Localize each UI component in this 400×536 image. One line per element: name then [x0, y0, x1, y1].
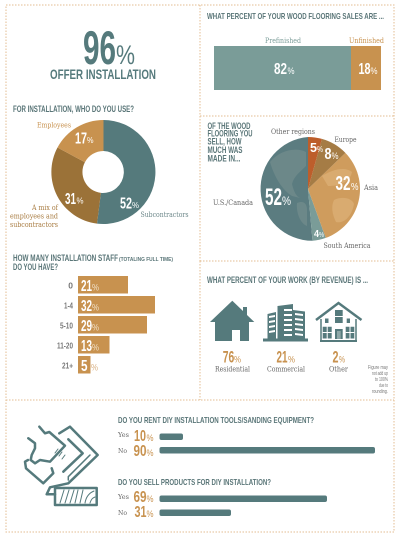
donut chart: installers	[10, 120, 189, 229]
pie chart: origin globe: Other regions	[271, 128, 315, 136]
stats: work by revenue: Commercial	[267, 366, 306, 374]
stats: work by revenue	[215, 348, 349, 374]
pie chart: origin globe: 5	[310, 140, 317, 155]
pie chart: origin globe: South America	[324, 242, 370, 250]
stats: work by revenue: Other	[329, 366, 349, 374]
stats: work by revenue: %	[339, 354, 345, 364]
bars: rent DIY tools: 10	[134, 428, 146, 445]
bar chart: installation staff: 29	[81, 318, 92, 335]
bars: rent DIY tools: %	[146, 448, 154, 458]
heading: sell DIY products: DO YOU SELL PRODUCTS FOR DIY INSTALLATION?	[118, 477, 271, 487]
pie chart: origin globe	[213, 128, 378, 250]
bars: rent DIY tools: %	[146, 433, 154, 443]
pie chart: origin globe: 52	[265, 184, 282, 211]
bar chart: installation staff: 21	[81, 278, 92, 295]
stacked bar: prefinished vs unfinished: Prefinished	[265, 37, 301, 45]
heading: who do you use: FOR INSTALLATION, WHO DO YOU USE?	[13, 104, 134, 114]
bars: sell DIY products: 31	[134, 504, 147, 521]
bar chart: installation staff: %	[91, 362, 98, 372]
bar chart: installation staff: 0	[68, 280, 73, 290]
bars: rent DIY tools: 90	[134, 443, 147, 460]
donut chart: installers: subcontractors	[10, 221, 58, 229]
heading: installation staff: (TOTALING FULL TIME)	[119, 257, 173, 263]
icon: office buildings	[263, 304, 308, 342]
bar chart: installation staff: 5	[81, 358, 88, 375]
heading: origin of wood flooring: MUCH WAS	[208, 145, 242, 155]
headline stat: 96% offer installation: 96	[83, 21, 116, 74]
footnote	[368, 365, 388, 395]
icon: house	[210, 301, 254, 341]
donut chart: installers: 17	[75, 130, 87, 148]
pie chart: origin globe: %	[319, 232, 324, 239]
bar chart: installation staff: %	[92, 282, 99, 292]
bars: sell DIY products: Yes	[117, 493, 129, 501]
bar chart: installation staff: %	[92, 322, 99, 332]
bar chart: installation staff: %	[92, 342, 99, 352]
pie chart: origin globe: %	[351, 182, 359, 193]
heading: origin of wood flooring	[208, 121, 252, 164]
bars: sell DIY products: %	[146, 509, 154, 519]
stats: work by revenue: %	[288, 354, 295, 364]
bar chart: installation staff: 1-4	[64, 300, 73, 310]
footnote: due to	[379, 383, 388, 389]
stacked bar: prefinished vs unfinished: 82	[274, 61, 287, 78]
donut chart: installers: A mix of	[31, 204, 59, 212]
stacked bar: prefinished vs unfinished: 18	[358, 61, 371, 78]
pie chart: origin globe: 4	[314, 229, 319, 240]
footnote: not add up	[372, 371, 388, 377]
bars: sell DIY products: No	[118, 509, 127, 517]
bars: sell DIY products: %	[146, 494, 154, 504]
heading: origin of wood flooring: MADE IN...	[208, 154, 240, 164]
icon: barn-style building	[316, 303, 362, 342]
bars: rent DIY tools: No	[118, 447, 127, 455]
donut chart: installers: %	[132, 200, 139, 210]
stacked bar: prefinished vs unfinished	[214, 37, 384, 90]
stats: work by revenue: 76	[223, 348, 234, 366]
stats: work by revenue: 2	[332, 348, 338, 366]
icon: floor sanding tool and wood plank	[25, 427, 98, 505]
footnote: Figure may	[368, 365, 388, 371]
donut chart: installers: %	[87, 135, 94, 145]
donut chart: installers: 31	[65, 191, 76, 208]
donut chart: installers: 52	[120, 196, 132, 212]
footnote: rounding.	[372, 389, 388, 395]
bar chart: installation staff: 13	[81, 338, 92, 355]
heading: origin of wood flooring: OF THE WOOD	[208, 121, 251, 131]
pie chart: origin globe: %	[282, 194, 291, 208]
heading: installation staff	[13, 253, 173, 272]
pie chart: origin globe: %	[332, 151, 338, 161]
stacked bar: prefinished vs unfinished: %	[370, 66, 378, 76]
stats: work by revenue: %	[234, 354, 241, 364]
heading: rent DIY tools: DO YOU RENT DIY INSTALLATION TOOLS/SANDING EQUIPMENT?	[118, 415, 314, 425]
pie chart: origin globe: Europe	[334, 136, 356, 144]
donut chart: installers: Employees	[37, 122, 71, 130]
bar chart: installation staff: 5-10	[60, 320, 73, 330]
pie chart: origin globe: U.S./Canada	[213, 199, 253, 207]
headline stat: 96% offer installation: %	[116, 40, 135, 70]
footnote: to 100%	[375, 377, 388, 383]
pie chart: origin globe: Asia	[363, 184, 378, 192]
bar chart: installation staff: 32	[81, 298, 92, 315]
bars: sell DIY products: 69	[134, 489, 147, 506]
stacked bar: prefinished vs unfinished: %	[288, 66, 294, 76]
bar chart: installation staff: 11-20	[57, 340, 73, 350]
heading: installation staff: DO YOU HAVE?	[13, 262, 58, 272]
stats: work by revenue: Residential	[215, 366, 251, 374]
pie chart: origin globe: 8	[324, 146, 332, 163]
headline stat: 96% offer installation: OFFER INSTALLATION	[50, 66, 156, 82]
donut chart: installers: employees and	[10, 212, 58, 220]
heading: origin of wood flooring: FLOORING YOU	[208, 129, 252, 139]
donut chart: installers: Subcontractors	[140, 211, 189, 219]
heading: origin of wood flooring: SELL, HOW	[208, 136, 242, 146]
bar chart: installation staff	[57, 276, 155, 375]
pie chart: origin globe: 32	[336, 173, 350, 195]
stats: work by revenue: 21	[276, 348, 288, 366]
pie chart: origin globe: %	[317, 145, 323, 154]
bar chart: installation staff: 21+	[62, 360, 73, 370]
bars: sell DIY products	[117, 489, 327, 521]
heading: installation staff: HOW MANY INSTALLATION STAFF	[13, 253, 118, 263]
stacked bar: prefinished vs unfinished: Unfinished	[349, 37, 384, 45]
bar chart: installation staff: %	[92, 302, 99, 312]
bars: rent DIY tools	[117, 428, 375, 460]
headline stat: 96% offer installation	[50, 21, 156, 82]
donut chart: installers: %	[76, 196, 84, 206]
bars: rent DIY tools: Yes	[117, 431, 129, 439]
